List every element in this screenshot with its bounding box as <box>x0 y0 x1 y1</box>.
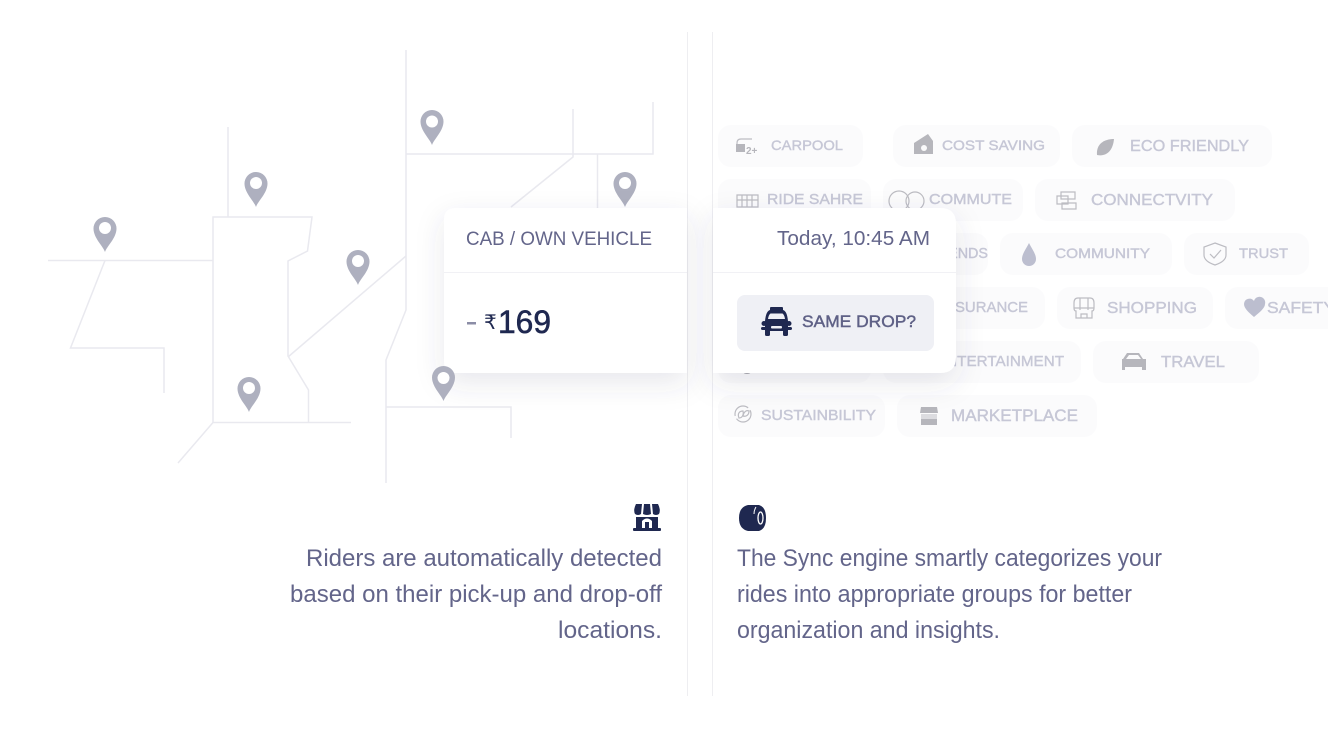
chip: ride share: RIDE SAHRE <box>767 191 863 208</box>
location pin over card <box>432 366 455 401</box>
chip: shopping <box>1057 287 1213 329</box>
text block: sync engine: organization and insights. <box>737 617 1000 644</box>
chip: hidden first chip row five <box>718 341 871 383</box>
card heading: vehicle type: CAB / OWN VEHICLE <box>466 228 652 250</box>
icon: tyre roll <box>739 505 766 531</box>
panel: category chips <box>718 125 1328 437</box>
chip: insurance <box>883 287 1045 329</box>
chip: shopping: SHOPPING <box>1107 300 1197 317</box>
button: same drop: SAME DROP? <box>802 312 916 331</box>
text block: rider detection: locations. <box>558 617 662 644</box>
fare amount: 169 <box>498 304 551 340</box>
chip: sustainability: SUSTAINBILITY <box>761 408 876 424</box>
location pins <box>94 110 636 412</box>
chip: ride share <box>718 179 871 221</box>
map roads <box>48 50 653 483</box>
chip: sustainability <box>718 395 885 437</box>
chip: friends <box>830 233 988 275</box>
fare amount <box>467 304 551 340</box>
chip: community <box>1000 233 1172 275</box>
chip: trust: TRUST <box>1239 245 1288 261</box>
chip: marketplace <box>897 395 1097 437</box>
chip: eco friendly <box>1072 125 1272 167</box>
ride time: Today, 10:45 AM <box>777 228 930 250</box>
chip: carpool: CARPOOL <box>771 137 843 153</box>
chip: safety: SAFETY <box>1267 300 1328 317</box>
text block: rider detection: based on their pick-up and drop-off <box>290 581 662 608</box>
text block: rider detection <box>290 545 662 644</box>
chip: commute: COMMUTE <box>929 191 1012 208</box>
chip: carpool: 2+ <box>746 146 758 157</box>
chip: commute <box>883 179 1023 221</box>
chip: travel <box>1093 341 1259 383</box>
text block: sync engine: The Sync engine smartly categorizes your <box>737 545 1162 572</box>
panel: route map <box>48 50 653 483</box>
fare amount: ₹ <box>484 310 497 334</box>
chip: eco friendly: ECO FRIENDLY <box>1130 138 1249 155</box>
text block: sync engine <box>737 545 1162 644</box>
chip: cost saving: COST SAVING <box>942 137 1045 153</box>
chip: entertainment: ENTERTAINMENT <box>936 353 1064 370</box>
chip: cost saving <box>893 125 1060 167</box>
chip: insurance: INSURANCE <box>940 299 1028 316</box>
chip: connectivity <box>1035 179 1235 221</box>
card: same drop <box>713 208 956 373</box>
chip: community: COMMUNITY <box>1055 245 1151 261</box>
chip: carpool <box>718 125 863 167</box>
icon: taxi <box>761 307 792 336</box>
chip: travel: TRAVEL <box>1161 354 1225 371</box>
text block: rider detection: Riders are automatically detected <box>306 545 662 572</box>
text block: sync engine: rides into appropriate groups for better <box>737 581 1132 608</box>
chip: marketplace: MARKETPLACE <box>951 407 1078 425</box>
chip: connectivity: CONNECTVITY <box>1091 192 1213 209</box>
chip: friends: FRIENDS <box>925 245 988 262</box>
icon: storefront <box>633 504 661 531</box>
button: same drop <box>737 295 934 351</box>
chip: entertainment <box>883 341 1081 383</box>
card: cab fare <box>444 208 687 373</box>
chip: safety <box>1225 287 1328 329</box>
chip: trust <box>1184 233 1309 275</box>
